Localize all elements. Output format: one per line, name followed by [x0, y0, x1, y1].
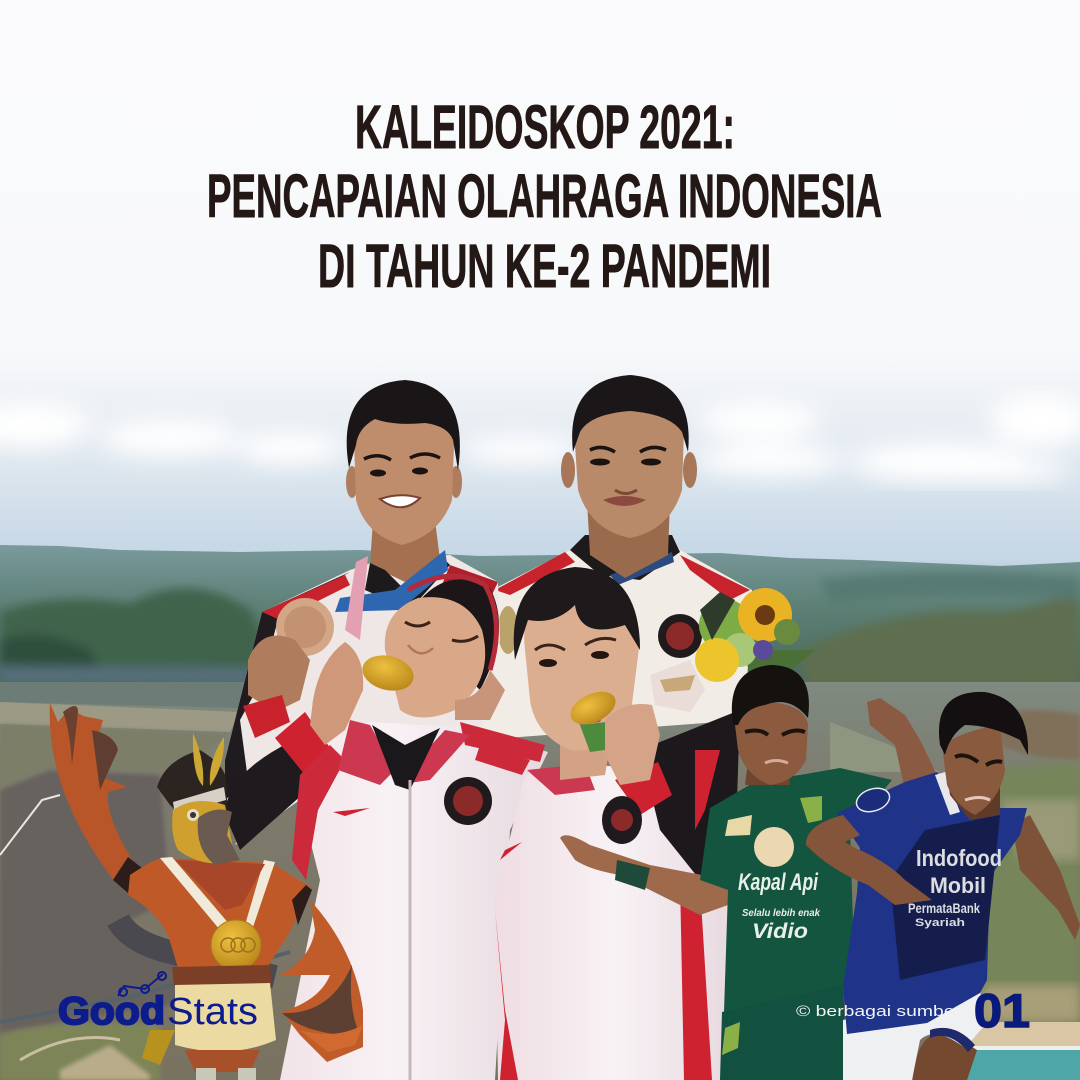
footballer: green kit: Kapal Api: [738, 869, 819, 896]
background: foreground hills: [0, 572, 1080, 722]
background: beach and sea: [960, 1022, 1080, 1080]
title: DI TAHUN KE-2 PANDEMI: [318, 232, 771, 300]
footballer: green kit: Selalu lebih enak: [742, 908, 820, 919]
title: [207, 93, 882, 300]
logo: GoodStats: Good: [58, 990, 165, 1033]
title: KALEIDOSKOP 2021:: [355, 93, 735, 161]
footballer: blue kit: Indofood: [916, 845, 1002, 871]
footballer: blue kit: Mobil: [930, 873, 986, 898]
mascot: Papua bird of PON games: [50, 703, 363, 1080]
footballer: green kit: [560, 665, 937, 1080]
page number: 01: [974, 984, 1030, 1037]
background: distant hills: [0, 545, 1080, 720]
credit text: © berbagai sumber: [796, 1003, 961, 1020]
background: racing circuit land: [0, 682, 1080, 1080]
athlete: badminton player, back left: [225, 380, 500, 820]
background: circuit track details: [0, 682, 1080, 1080]
background: sky: [0, 0, 1080, 600]
athlete: badminton player kissing medal: [225, 576, 548, 1080]
footballer: blue kit: Syariah: [915, 917, 965, 929]
footballer: green kit: Vidio: [752, 920, 808, 943]
logo: GoodStats: [58, 972, 258, 1033]
footballer: blue kit: [806, 692, 1080, 1080]
athlete: weightlifter, back right: [480, 375, 752, 740]
athlete: badminton player with bouquet: [495, 567, 740, 1080]
logo: GoodStats: Stats: [167, 991, 258, 1033]
flower bouquet: [695, 588, 815, 682]
background: clouds: [0, 394, 1080, 482]
footballer: blue kit: PermataBank: [908, 900, 980, 916]
